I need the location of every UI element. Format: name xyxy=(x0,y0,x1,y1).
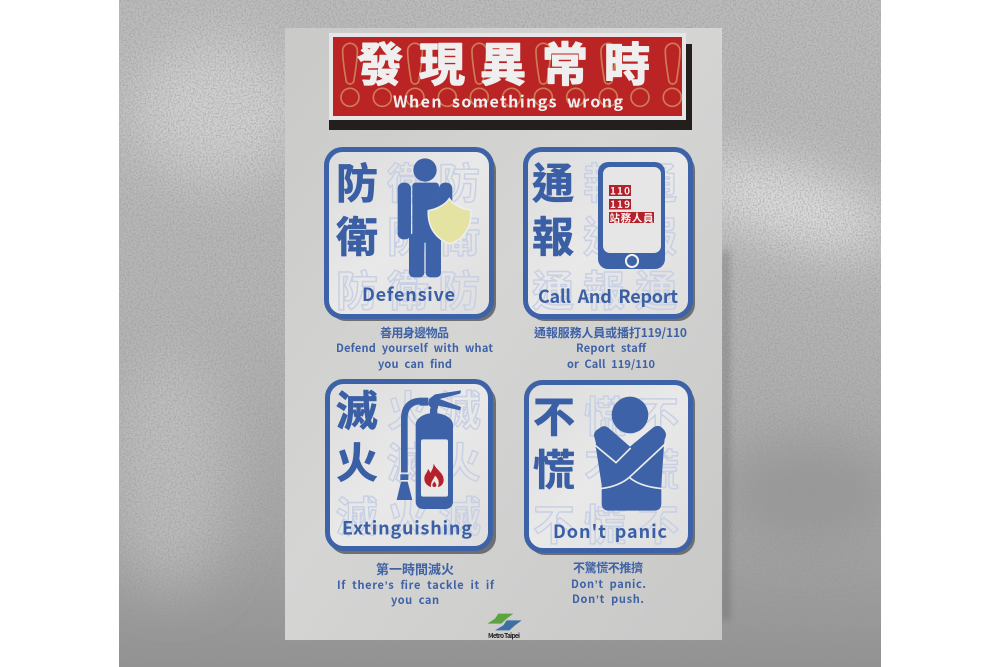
ghost characters: 衛 xyxy=(387,150,429,212)
ghost characters: 防 xyxy=(438,150,480,212)
caption: 不驚慌不推擠 xyxy=(573,559,643,576)
banner heading: 現 xyxy=(419,29,465,95)
caption: 通報服務人員或播打119/110 xyxy=(534,324,687,341)
ghost characters: 報 xyxy=(583,150,625,212)
icon: smartphone: 站務人員 xyxy=(610,210,654,226)
ghost characters: 衛 xyxy=(438,204,480,265)
ghost characters xyxy=(532,150,677,319)
ghost characters: 不 xyxy=(637,492,679,553)
banner heading: 常 xyxy=(542,29,588,95)
banner heading xyxy=(357,29,650,95)
ghost characters: 報 xyxy=(635,204,677,265)
caption: or Call 119/110 xyxy=(567,356,655,372)
ghost characters xyxy=(336,150,480,319)
ghost characters: 慌 xyxy=(637,437,679,498)
caption: Don’t panic. xyxy=(571,576,646,592)
heading characters: 慌 xyxy=(533,437,575,498)
heading characters: 火 xyxy=(336,430,378,491)
heading characters xyxy=(533,384,575,498)
banner exclamation pattern xyxy=(341,43,681,106)
heading characters: 防 xyxy=(336,150,378,212)
panel: call and report xyxy=(526,150,695,372)
ghost characters: 不 xyxy=(533,492,575,553)
heading characters xyxy=(336,150,378,265)
caption: Don’t push. xyxy=(572,591,644,607)
ghost characters: 火 xyxy=(387,378,429,439)
icon: smartphone: 110 xyxy=(610,182,630,198)
icon: smartphone xyxy=(598,162,665,269)
caption: 善用身邊物品 xyxy=(380,324,449,341)
poster sheet xyxy=(285,28,722,640)
caption xyxy=(337,559,495,608)
icon: person with shield xyxy=(398,158,471,277)
caption: 第一時間滅火 xyxy=(376,559,454,578)
ghost characters: 防 xyxy=(336,258,378,319)
background: concrete wall xyxy=(110,0,905,667)
ghost characters: 通 xyxy=(635,150,677,212)
ghost characters xyxy=(336,378,481,545)
ghost characters: 滅 xyxy=(439,378,481,439)
ghost characters: 防 xyxy=(438,258,480,319)
heading characters: 不 xyxy=(533,384,575,445)
heading characters: 通 xyxy=(532,150,574,212)
heading characters xyxy=(336,378,378,491)
caption: If there’s fire tackle it if xyxy=(337,577,495,593)
ghost characters: 通 xyxy=(635,258,677,319)
caption: you can xyxy=(391,592,439,608)
ghost characters: 滅 xyxy=(439,484,481,545)
logo: Metro Taipei: Metro Taipei xyxy=(488,630,520,640)
panel: defensive xyxy=(326,150,496,372)
ghost characters: 不 xyxy=(584,437,626,498)
banner heading: 異 xyxy=(480,29,526,95)
ghost characters: 滅 xyxy=(387,430,429,491)
panel: don't panic xyxy=(526,382,695,607)
ghost characters xyxy=(533,384,679,553)
ghost characters: 滅 xyxy=(336,484,378,545)
caption: Report staff xyxy=(576,340,647,356)
label: Don't panic: Don't panic xyxy=(553,518,667,544)
heading characters xyxy=(532,150,574,265)
icon: person with crossed arms xyxy=(594,397,667,511)
icon: smartphone: 119 xyxy=(610,196,630,211)
title banner xyxy=(329,29,692,130)
label: Extinguishing: Extinguishing xyxy=(342,514,472,540)
ghost characters: 火 xyxy=(439,430,481,491)
ghost characters: 通 xyxy=(583,204,625,265)
caption xyxy=(336,324,493,372)
ghost characters: 火 xyxy=(387,484,429,545)
caption xyxy=(571,559,646,607)
banner heading: 時 xyxy=(604,29,650,95)
banner subtitle: When somethings wrong xyxy=(393,88,623,112)
ghost characters: 慌 xyxy=(584,384,626,445)
icon: fire extinguisher xyxy=(397,390,461,509)
caption: you can find xyxy=(378,356,452,372)
heading characters: 衛 xyxy=(336,204,378,265)
ghost characters: 通 xyxy=(532,258,574,319)
ghost characters: 不 xyxy=(637,384,679,445)
caption xyxy=(534,324,687,372)
ghost characters: 慌 xyxy=(584,492,626,553)
banner heading: 發 xyxy=(357,29,403,95)
heading characters: 報 xyxy=(532,204,574,265)
ghost characters: 衛 xyxy=(387,258,429,319)
logo: Metro Taipei xyxy=(487,614,522,640)
caption: Defend yourself with what xyxy=(336,340,493,356)
panel: extinguishing xyxy=(328,378,496,608)
ghost characters: 防 xyxy=(387,204,429,265)
ghost characters: 報 xyxy=(583,258,625,319)
heading characters: 滅 xyxy=(336,378,378,439)
label: Defensive: Defensive xyxy=(362,281,455,307)
label: Call And Report: Call And Report xyxy=(538,283,678,309)
